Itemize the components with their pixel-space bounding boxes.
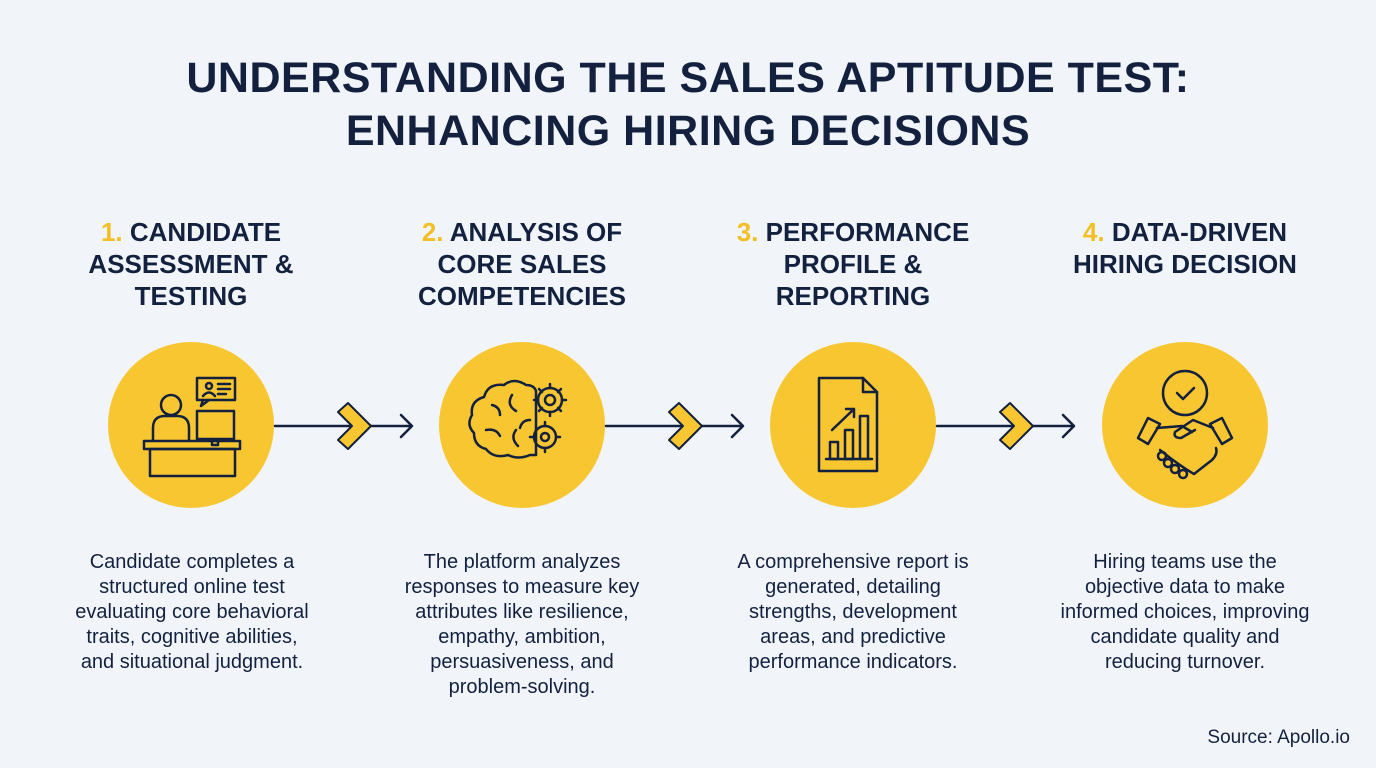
heading: step 1 (88, 217, 294, 311)
heading: step 1: ASSESSMENT & (88, 249, 294, 279)
text: step 1 description: structured online test (99, 576, 285, 598)
text: step 2 description: The platform analyzes (424, 551, 620, 573)
text: step 2 description: responses to measure key (405, 576, 639, 598)
icon: brain and gears (439, 342, 605, 508)
heading: step 3 (737, 217, 969, 311)
text: step 1 description: traits, cognitive abilities, (86, 626, 298, 648)
title: ENHANCING HIRING DECISIONS (346, 107, 1030, 155)
text: step 4 description: reducing turnover. (1105, 651, 1265, 673)
heading: step 3: PROFILE & (784, 249, 922, 279)
text: step 3 description (737, 551, 969, 673)
heading: step 4: 4. DATA-DRIVEN (1083, 217, 1287, 247)
text: step 3 description: areas, and predictive (760, 626, 946, 648)
text: step 4 description: objective data to make (1085, 576, 1285, 598)
heading: step 3: 3. PERFORMANCE (737, 217, 969, 247)
text: step 4 description: Hiring teams use the (1093, 551, 1277, 573)
heading: step 1: 1. CANDIDATE (101, 217, 281, 247)
heading: step 2 (418, 217, 626, 311)
text: step 4 description (1060, 551, 1310, 673)
text: step 2 description (405, 551, 640, 698)
text: step 4 description: informed choices, improving (1060, 601, 1310, 623)
title: UNDERSTANDING THE SALES APTITUDE TEST: (186, 54, 1190, 102)
text: step 1 description: Candidate completes a (90, 551, 294, 573)
source: Source: Apollo.io (1207, 727, 1350, 748)
text: step 2 description: problem-solving. (449, 676, 595, 698)
heading: step 2: CORE SALES (437, 249, 607, 279)
text: step 4 description: candidate quality and (1090, 626, 1280, 648)
text: step 2 description: attributes like resilience, (415, 601, 629, 623)
text: step 2 description: empathy, ambition, (438, 626, 606, 648)
icon: report document (770, 342, 936, 508)
text: step 3 description: performance indicators. (748, 651, 957, 673)
icon: candidate at desk (108, 342, 274, 508)
text: step 3 description: strengths, development (749, 601, 957, 623)
heading: step 1: TESTING (135, 281, 247, 311)
arrow 1 (275, 403, 412, 449)
heading: step 4: HIRING DECISION (1073, 249, 1297, 279)
heading: step 2: COMPETENCIES (418, 281, 626, 311)
text: step 1 description (75, 551, 309, 673)
text: step 3 description: A comprehensive report is (737, 551, 969, 573)
arrow 2 (606, 403, 743, 449)
title (186, 54, 1190, 155)
heading: step 4 (1073, 217, 1297, 279)
text: step 1 description: and situational judgment. (81, 651, 303, 673)
arrow 3 (937, 403, 1074, 449)
icon: handshake with check (1102, 342, 1268, 508)
text: step 1 description: evaluating core behavioral (75, 601, 309, 623)
text: step 3 description: generated, detailing (765, 576, 941, 598)
heading: step 3: REPORTING (776, 281, 930, 311)
text: step 2 description: persuasiveness, and (430, 651, 614, 673)
heading: step 2: 2. ANALYSIS OF (422, 217, 622, 247)
